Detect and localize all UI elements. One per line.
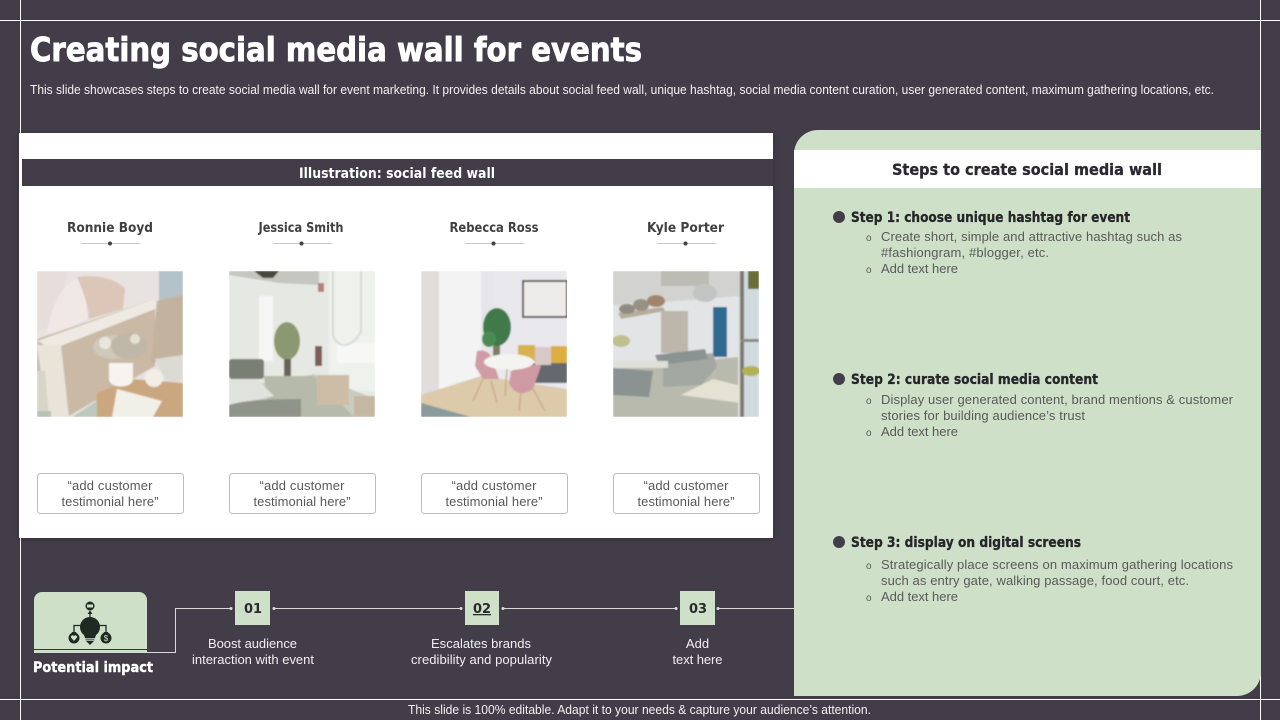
impact 03 bbox=[672, 591, 722, 667]
impact 02: 02 bbox=[473, 602, 491, 617]
profile: Rebecca Ross: Rebecca Ross bbox=[450, 220, 538, 236]
step 2: Step 2: curate social media content bbox=[851, 372, 1098, 388]
step 3: o bbox=[866, 561, 872, 572]
photo: living room with blue curtain bbox=[613, 271, 759, 417]
testimonial box: testimonial here” bbox=[638, 494, 734, 509]
step 2: o bbox=[866, 428, 872, 439]
testimonial box: testimonial here” bbox=[254, 494, 350, 509]
photo: sofa with flowers bbox=[37, 271, 183, 417]
connector timeline bbox=[147, 607, 794, 652]
profile: Jessica Smith bbox=[229, 220, 376, 514]
testimonial box: testimonial here” bbox=[62, 494, 158, 509]
step 1: o bbox=[866, 233, 872, 244]
impact 03: Add bbox=[686, 636, 709, 651]
testimonial box bbox=[38, 474, 184, 514]
impact 02: credibility and popularity bbox=[411, 652, 552, 667]
panel heading bar: Illustration: social feed wall bbox=[299, 166, 495, 182]
testimonial box: “add customer bbox=[260, 478, 345, 493]
testimonial box bbox=[230, 474, 376, 514]
profile: Ronnie Boyd bbox=[37, 220, 184, 514]
profile: Jessica Smith: Jessica Smith bbox=[258, 220, 344, 236]
steps heading: Steps to create social media wall bbox=[892, 160, 1162, 179]
profile: Ronnie Boyd: Ronnie Boyd bbox=[67, 220, 153, 236]
subtitle description: This slide showcases steps to create social media wall for event marketing. It provides details about social feed wall, unique hashtag, social media content curation, user generated content, maximum gathering locations, etc. bbox=[30, 82, 1214, 97]
title: Creating social media wall for events bbox=[30, 30, 642, 69]
step 3: o bbox=[866, 593, 872, 604]
impact 03: text here bbox=[672, 652, 722, 667]
impact 01 bbox=[192, 591, 314, 667]
step 1: #fashiongram, #blogger, etc. bbox=[881, 245, 1049, 260]
step 1 bbox=[833, 210, 1182, 276]
potential impact label: Potential impact bbox=[33, 660, 153, 676]
footer note: This slide is 100% editable. Adapt it to your needs & capture your audience’s attention. bbox=[408, 702, 871, 717]
step 3: such as entry gate, walking passage, food court, etc. bbox=[881, 573, 1189, 588]
step 2: Add text here bbox=[881, 424, 958, 439]
testimonial box: “add customer bbox=[644, 478, 729, 493]
step 2: o bbox=[866, 396, 872, 407]
profile: Rebecca Ross bbox=[421, 220, 568, 514]
impact 01: 01 bbox=[244, 602, 262, 617]
step 3: Strategically place screens on maximum gathering locations bbox=[881, 557, 1234, 572]
step 2: stories for building audience’s trust bbox=[881, 408, 1085, 423]
panel: steps to create social media wall bbox=[794, 130, 1261, 696]
testimonial box: testimonial here” bbox=[446, 494, 542, 509]
steps heading bbox=[794, 150, 1261, 188]
photo: dining room with pink chairs bbox=[421, 271, 567, 417]
photo: white hallway with plant bbox=[229, 271, 375, 417]
step 3: Add text here bbox=[881, 589, 958, 604]
step 1: Create short, simple and attractive hashtag such as bbox=[881, 229, 1182, 244]
panel heading bar bbox=[22, 159, 773, 186]
panel: illustration social feed wall bbox=[19, 133, 773, 538]
testimonial box: “add customer bbox=[452, 478, 537, 493]
profile: Kyle Porter bbox=[612, 220, 760, 514]
step 2 bbox=[833, 372, 1234, 439]
step 3: Step 3: display on digital screens bbox=[851, 535, 1081, 551]
impact 03: 03 bbox=[689, 602, 707, 617]
profile: Kyle Porter: Kyle Porter bbox=[647, 220, 724, 236]
step 1: Add text here bbox=[881, 261, 958, 276]
icon: idea bulb with branches: $ bbox=[104, 634, 109, 643]
step 1: Step 1: choose unique hashtag for event bbox=[851, 210, 1130, 226]
impact 01: interaction with event bbox=[192, 652, 314, 667]
impact 02: Escalates brands bbox=[431, 636, 532, 651]
testimonial box: “add customer bbox=[68, 478, 153, 493]
step 3 bbox=[833, 535, 1234, 604]
step 2: Display user generated content, brand mentions & customer bbox=[881, 392, 1234, 407]
impact 02 bbox=[411, 591, 552, 667]
testimonial box bbox=[614, 474, 760, 514]
potential impact card bbox=[34, 592, 147, 653]
testimonial box bbox=[422, 474, 568, 514]
impact 01: Boost audience bbox=[208, 636, 297, 651]
step 1: o bbox=[866, 265, 872, 276]
